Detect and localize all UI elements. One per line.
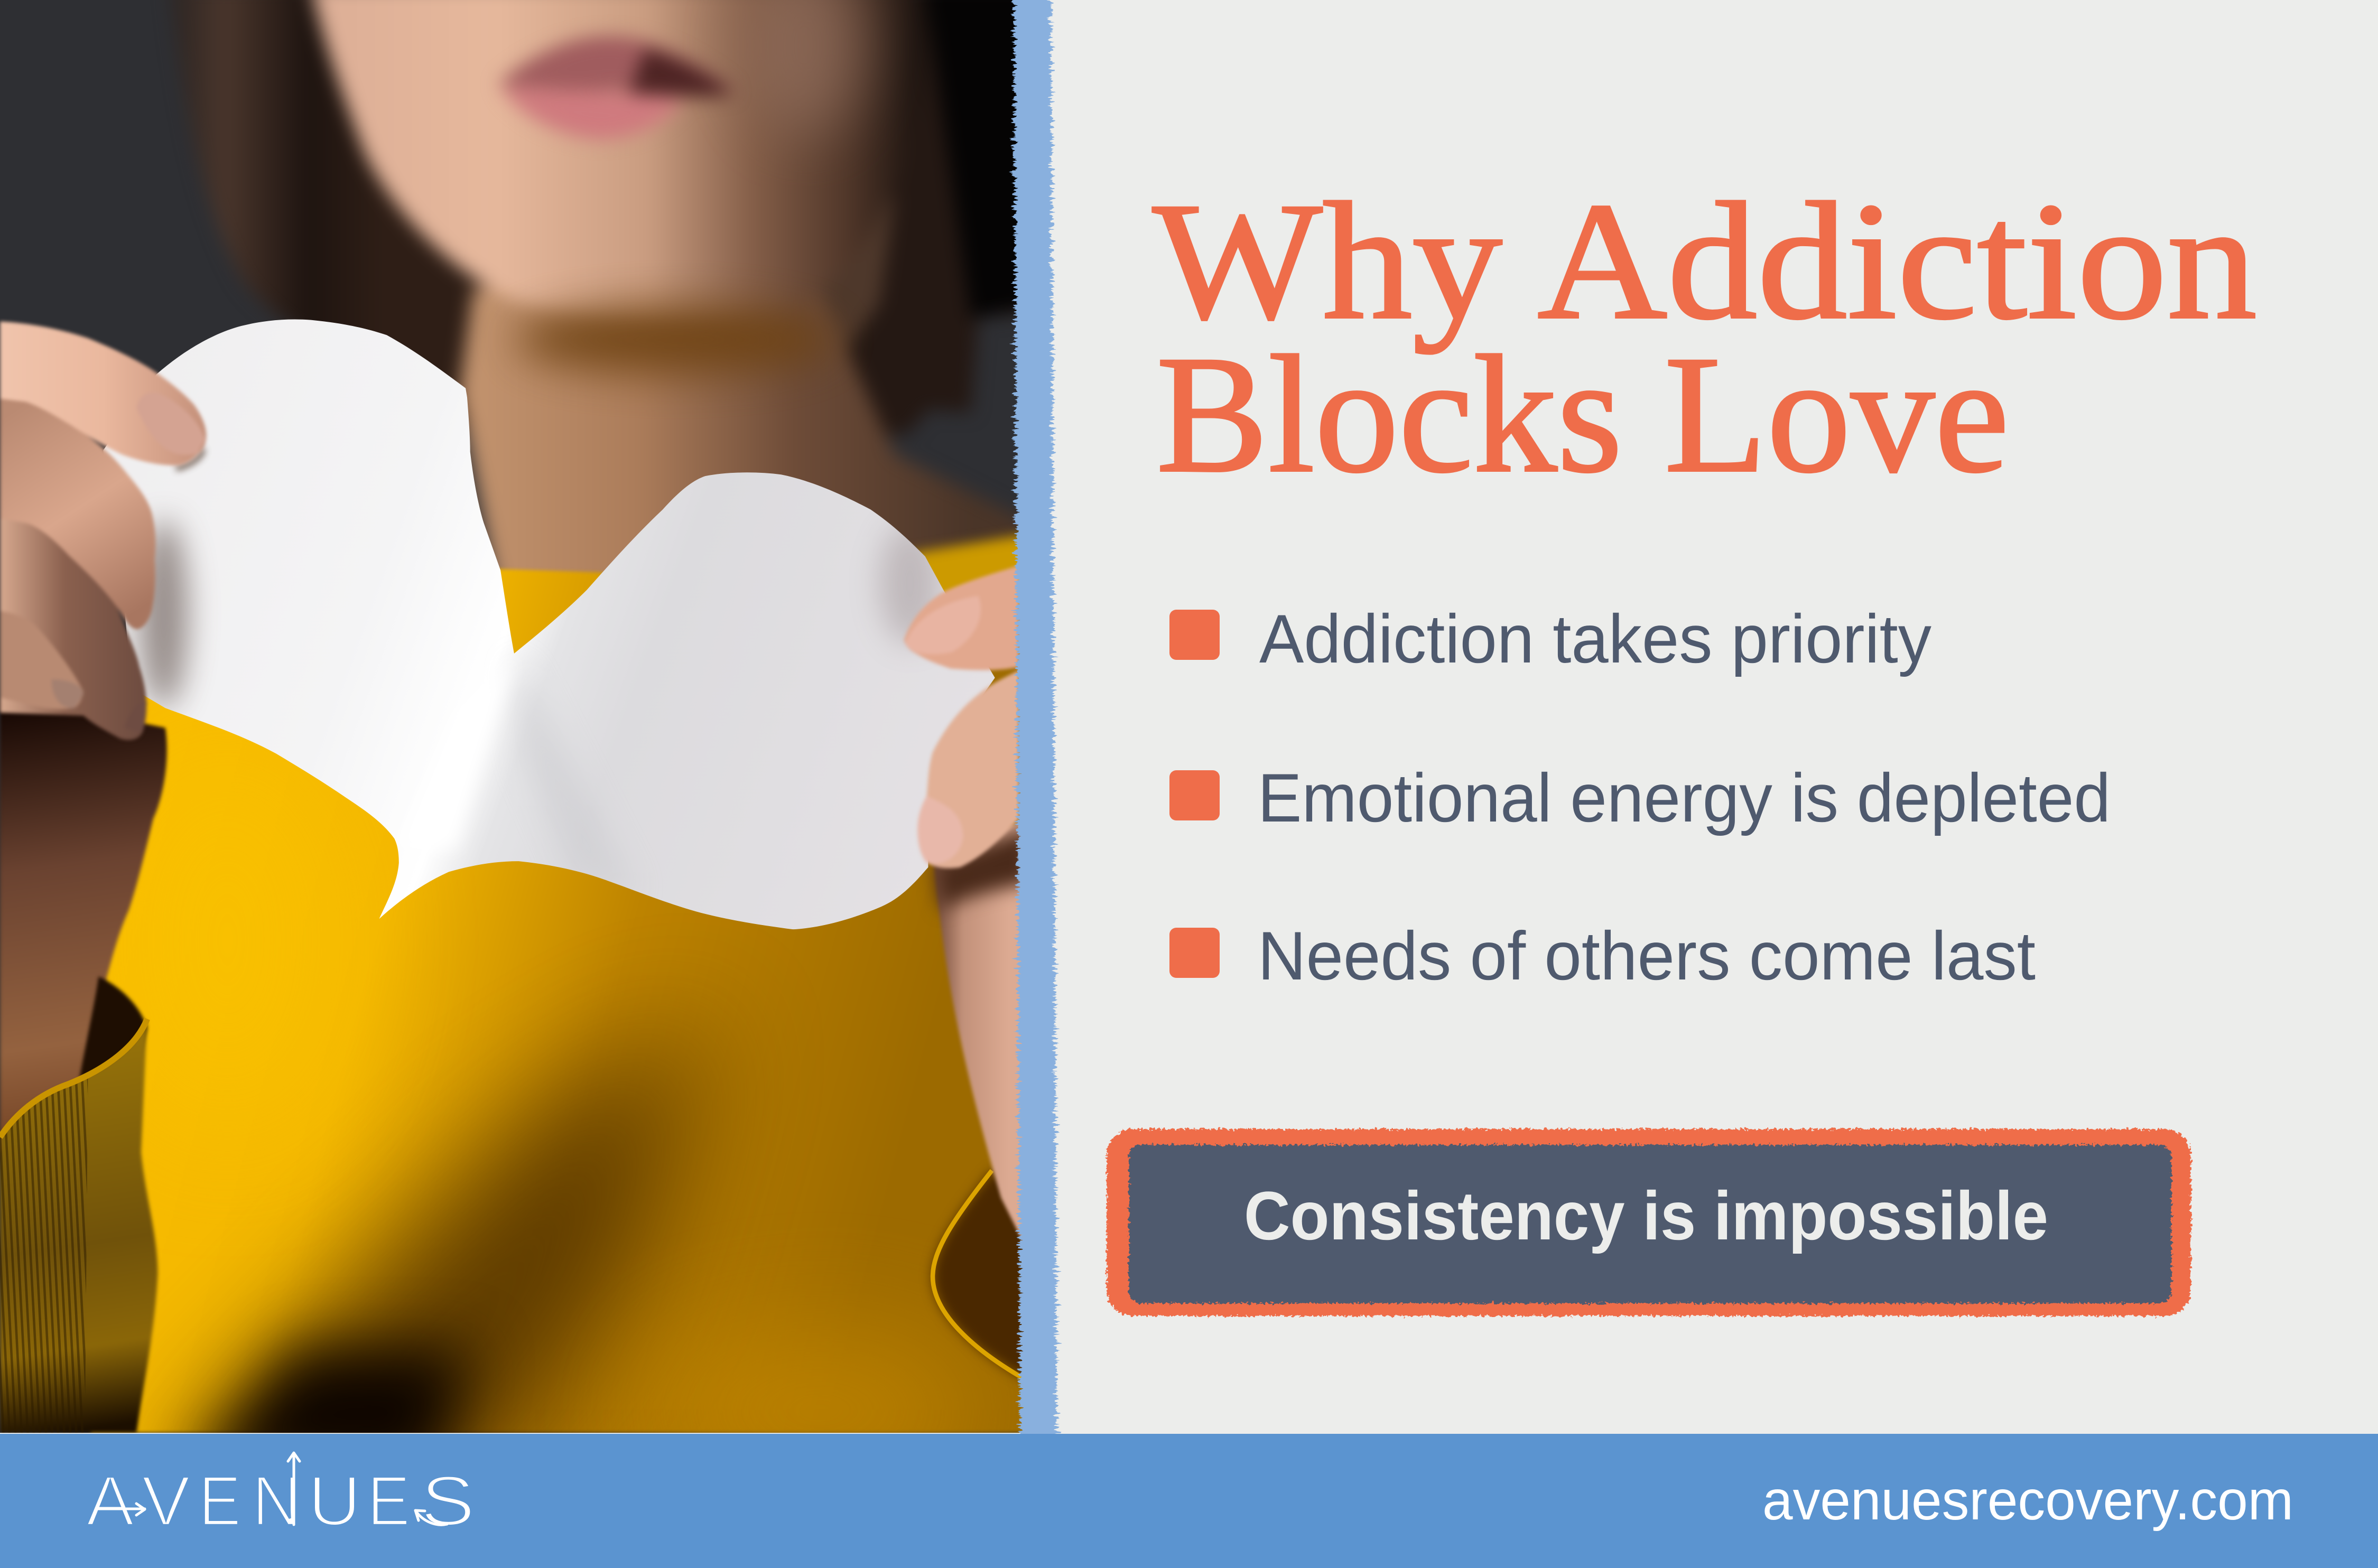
logo: AVENUES: U	[308, 1462, 361, 1541]
chin shadow	[516, 306, 834, 373]
second finger	[0, 391, 155, 629]
third finger	[0, 508, 146, 740]
thumb	[904, 566, 1019, 670]
sweater	[91, 534, 1032, 1494]
right cuff	[933, 1171, 1032, 1383]
left hand fingers	[0, 321, 206, 740]
logo: AVENUES: A	[86, 1462, 135, 1541]
left palm and forearm	[0, 697, 167, 1152]
logo: AVENUES: E	[367, 1462, 410, 1541]
blue torn strip	[1014, 0, 1057, 1440]
photo background	[0, 0, 1032, 1433]
fingertip shadow	[176, 449, 203, 469]
cuff cavity	[79, 976, 147, 1082]
footer bar	[0, 1434, 2378, 1568]
logo: AVENUES: S	[421, 1462, 475, 1541]
logo: AVENUES: E	[199, 1462, 241, 1541]
website url: avenuesrecovery.com	[1762, 1469, 2293, 1532]
title	[1153, 168, 2257, 507]
title: Why Addiction	[1153, 168, 2257, 354]
callout button: Consistency is impossible	[1244, 1177, 2048, 1254]
logo: AVENUES: N	[252, 1462, 301, 1541]
sweater shadow	[106, 743, 986, 1494]
bullet list	[1169, 600, 2111, 994]
title: Blocks Love	[1156, 321, 2009, 507]
lower finger	[917, 670, 1019, 868]
yellow shoulder behind hand	[910, 534, 1032, 606]
bullet: addiction takes priority: Addiction takes priority	[1259, 600, 1931, 677]
callout button	[1107, 1129, 2191, 1316]
left sleeve	[0, 1019, 157, 1433]
lips	[497, 36, 734, 139]
right lower arm	[933, 819, 1032, 1258]
logo: AVENUES	[86, 1453, 475, 1541]
paper heart	[91, 303, 1016, 940]
top finger	[0, 321, 206, 465]
face	[311, 0, 928, 321]
logo: AVENUES: V	[142, 1462, 190, 1541]
bullet: needs of others come last: Needs of others come last	[1258, 917, 2036, 994]
fourth finger	[0, 611, 83, 709]
neck	[460, 288, 1032, 606]
photo: woman tearing a paper heart	[0, 0, 1046, 1494]
hair	[170, 0, 1046, 455]
logo arrows	[96, 1453, 447, 1525]
paper shading	[140, 520, 940, 894]
right hand	[904, 566, 1019, 868]
upper cheek tone	[743, 0, 865, 136]
bullet: emotional energy is depleted: Emotional energy is depleted	[1258, 759, 2111, 836]
